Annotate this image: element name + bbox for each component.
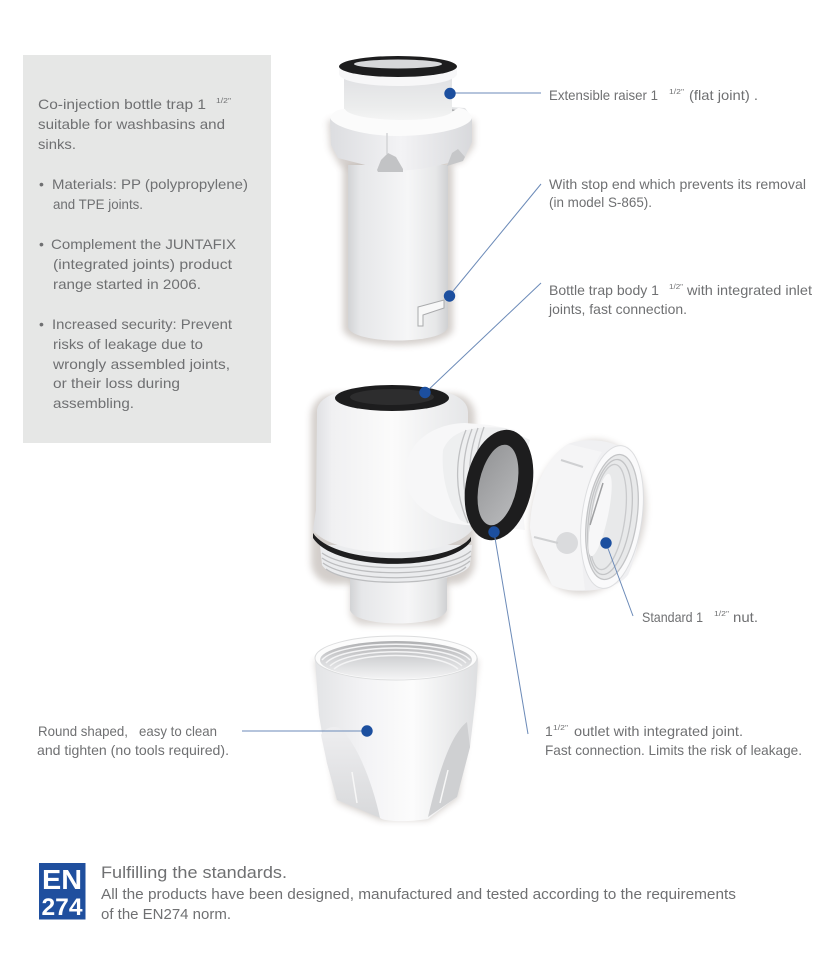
- callout: round shaped: easy to clean: [139, 723, 217, 739]
- panel: product description: [23, 55, 271, 443]
- bullet: security: risks of leakage due to: [53, 336, 203, 352]
- intro text: sinks.: [38, 136, 76, 152]
- callout: stop end: (in model S-865).: [549, 194, 652, 210]
- callout: outlet: [545, 723, 802, 758]
- bullet: security: •: [39, 316, 44, 332]
- marker dots: [361, 88, 612, 737]
- callout: bottle trap body: with integrated inlet: [686, 282, 812, 298]
- leader line: raiser: [450, 92, 541, 94]
- leader line: cup: [242, 730, 367, 732]
- bullet: security: assembling.: [53, 395, 134, 411]
- illustration: standard nut: [516, 429, 660, 605]
- callout: stop end: [549, 176, 806, 210]
- badge: EN 274: 274: [42, 894, 83, 921]
- callout: outlet: 1/2": [553, 725, 569, 732]
- badge: EN 274: [39, 863, 86, 921]
- bullet: complement: Complement the JUNTAFIX: [51, 236, 237, 252]
- bullet: complement: •: [39, 236, 44, 252]
- callout: extensible raiser: (flat joint) .: [689, 87, 758, 103]
- callout: outlet: 1: [545, 723, 553, 739]
- callout: round shaped: and tighten (no tools required).: [37, 742, 229, 758]
- bullet: security: or their loss during: [53, 375, 180, 391]
- illustration: extensible raiser: [328, 56, 474, 345]
- footer: standards text: of the EN274 norm.: [101, 906, 231, 923]
- bullet: security: wrongly assembled joints,: [52, 356, 230, 372]
- callout: standard nut: [642, 609, 758, 625]
- bullet: materials: Materials: PP (polypropylene): [52, 176, 248, 192]
- callout: bottle trap body: [548, 282, 812, 317]
- intro text: [38, 96, 232, 152]
- callout: round shaped: [37, 723, 229, 758]
- callout: extensible raiser: Extensible raiser 1: [549, 87, 658, 103]
- callout: standard nut: nut.: [733, 609, 758, 625]
- leader line: outlet: [494, 532, 528, 734]
- callout: outlet: Fast connection. Limits the risk of leakage.: [545, 742, 802, 758]
- callout: bottle trap body: 1/2": [669, 284, 684, 291]
- bullet: complement: range started in 2006.: [53, 276, 201, 292]
- callout: bottle trap body: joints, fast connection.: [548, 301, 687, 317]
- bullet: materials: •: [39, 176, 44, 192]
- bullet: materials: and TPE joints.: [53, 196, 143, 212]
- callout: stop end: With stop end which prevents its removal: [549, 176, 806, 192]
- callout: standard nut: 1/2": [714, 611, 730, 618]
- intro text: Co-injection bottle trap 1: [38, 96, 206, 112]
- bullet: security: [39, 316, 232, 411]
- illustration: bottle trap body: [311, 385, 543, 625]
- bullet: complement: (integrated joints) product: [53, 256, 232, 272]
- callout: outlet: outlet with integrated joint.: [574, 723, 743, 739]
- leader line: nut: [606, 543, 633, 616]
- intro text: suitable for washbasins and: [38, 116, 225, 132]
- footer: standards text: [101, 863, 736, 923]
- bullet: materials: [39, 176, 248, 212]
- leader line: body: [425, 283, 541, 393]
- badge: EN 274: EN: [42, 864, 82, 895]
- illustration: bottom cup: [315, 636, 478, 821]
- callout: bottle trap body: Bottle trap body 1: [549, 282, 659, 298]
- callout: standard nut: Standard 1: [642, 609, 703, 625]
- bullet: security: Increased security: Prevent: [52, 316, 232, 332]
- footer: standards text: Fulfilling the standards.: [101, 863, 287, 882]
- callout: round shaped: Round shaped,: [38, 723, 128, 739]
- footer: standards text: All the products have been designed, manufactured and tested according to the requirements: [101, 886, 736, 903]
- intro text: 1/2": [216, 98, 232, 105]
- leader line: stop end: [449, 184, 541, 296]
- callout: extensible raiser: [549, 87, 758, 103]
- bullet: complement: [39, 236, 237, 292]
- callout: extensible raiser: 1/2": [669, 89, 685, 96]
